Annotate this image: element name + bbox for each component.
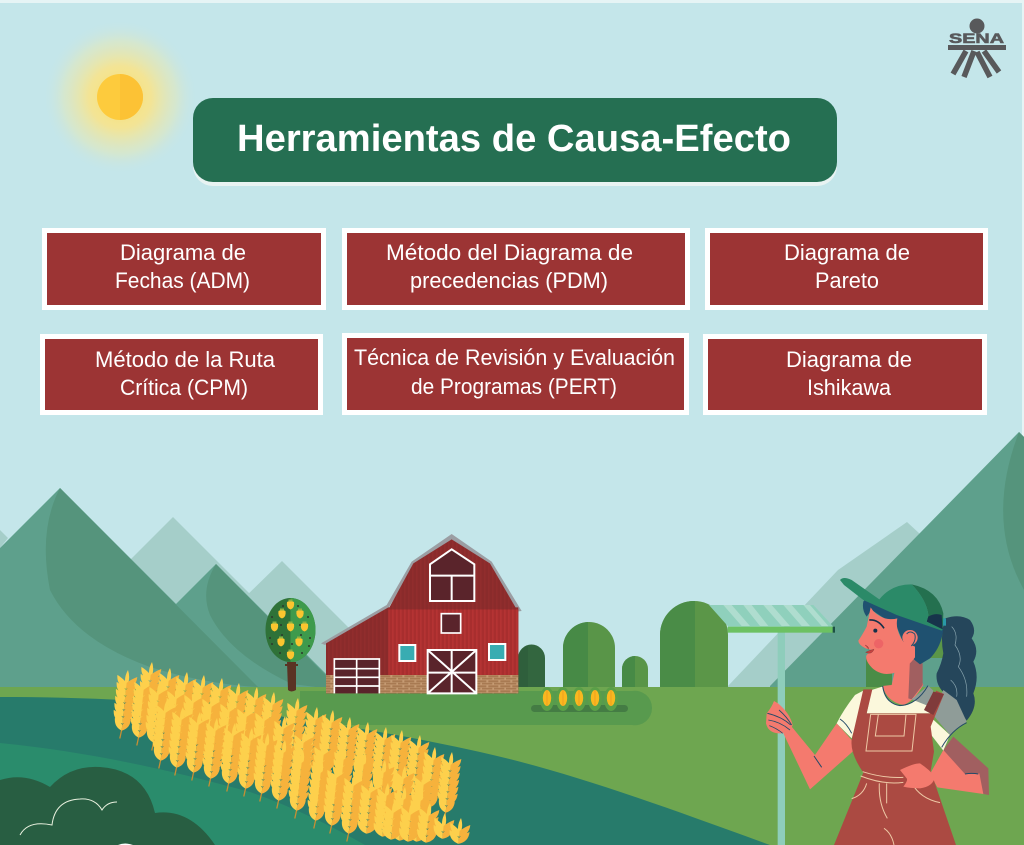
hair [863, 600, 943, 664]
face [858, 607, 918, 674]
box: Diagrama de Ishikawa [706, 336, 984, 412]
box: Diagrama de Ishikawa: Diagrama de [786, 347, 912, 372]
lower field band [0, 743, 365, 845]
bush [0, 767, 215, 845]
barn door [428, 650, 476, 693]
box: Diagrama de Pareto: Pareto [815, 268, 879, 293]
box: Diagrama de Pareto: Diagrama de [784, 240, 910, 265]
farmer with rake [709, 578, 989, 845]
orchard tree [266, 598, 316, 692]
box: Método de la Ruta Crítica (CPM): Crítica (CPM) [120, 375, 248, 400]
arm holding rake [783, 723, 853, 789]
title banner [193, 98, 837, 186]
cap [840, 578, 943, 631]
barn upper window [430, 549, 474, 601]
box: Método de la Ruta Crítica (CPM) [42, 336, 320, 412]
box: Diagrama de Fechas (ADM) [44, 230, 324, 308]
box: Diagrama de Fechas (ADM): Diagrama de [120, 240, 246, 265]
river band [0, 697, 770, 845]
corn row [531, 687, 628, 712]
barn garage door [334, 659, 379, 693]
arm holding hip [930, 750, 983, 794]
box: Método del Diagrama de precedencias (PDM): Método del Diagrama de [386, 240, 633, 265]
box: Método del Diagrama de precedencias (PDM): precedencias (PDM) [410, 268, 608, 293]
ponytail [936, 616, 977, 721]
barn teal windows [399, 644, 505, 661]
box: Diagrama de Fechas (ADM): Fechas (ADM) [115, 268, 250, 293]
box: Método de la Ruta Crítica (CPM): Método de la Ruta [95, 347, 276, 372]
box: Método del Diagrama de precedencias (PDM) [344, 230, 688, 308]
background trees [518, 601, 947, 692]
box: Técnica de Revisión y Evaluación de Programas (PERT): de Programas (PERT) [411, 374, 617, 399]
rake [709, 605, 835, 845]
barn small window [441, 614, 461, 633]
hand on rake [766, 701, 793, 733]
box: Diagrama de Pareto [708, 230, 986, 308]
logo: SENA [948, 18, 1006, 77]
icon: sun with glow [42, 19, 198, 175]
overalls [834, 689, 956, 845]
hand on hip [900, 763, 935, 788]
box: Técnica de Revisión y Evaluación de Programas (PERT): Técnica de Revisión y Evaluación [354, 345, 675, 370]
wheat field [111, 661, 471, 845]
mountains: right range [728, 432, 1024, 690]
title banner: Herramientas de Causa-Efecto [237, 118, 791, 160]
mountains: left range [0, 488, 360, 690]
box: Diagrama de Ishikawa: Ishikawa [807, 375, 892, 400]
shirt sleeves [837, 690, 967, 751]
ground [0, 687, 1024, 845]
arm in shadow [943, 737, 989, 795]
shirt collar [867, 686, 933, 713]
box: Técnica de Revisión y Evaluación de Programas (PERT) [344, 336, 686, 412]
barn [321, 534, 522, 693]
neck and chest [883, 657, 923, 705]
logo: SENA: SENA [949, 30, 1004, 46]
